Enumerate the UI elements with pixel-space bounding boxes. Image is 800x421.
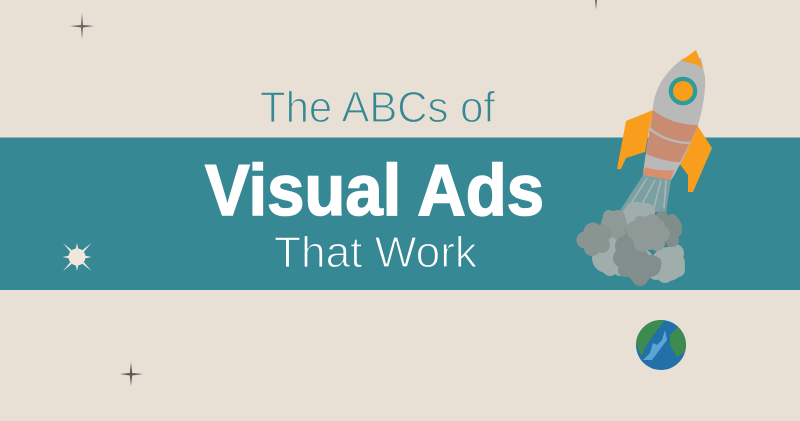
teal banner (0, 138, 800, 290)
rocket exhaust streaks (619, 175, 671, 212)
left fin (617, 110, 653, 169)
rocket body (643, 58, 705, 180)
icon: star bottom left (120, 362, 143, 386)
title line: The ABCs of: The ABCs of (260, 83, 496, 132)
smoke cloud (576, 202, 685, 286)
title line: That Work: That Work (274, 228, 478, 277)
rocket nose cone (681, 50, 703, 68)
rocket lower salmon nozzle (643, 167, 674, 180)
right fin (679, 125, 712, 192)
icon: earth globe (636, 320, 686, 370)
icon: star top edge (595, 0, 597, 10)
rocket window (669, 77, 697, 105)
icon: rocket with smoke (576, 50, 712, 286)
title line: Visual Ads: Visual Ads (205, 151, 544, 231)
rocket stripe (649, 128, 690, 143)
rocket body salmon section (646, 110, 698, 162)
icon: star top left (70, 13, 94, 39)
icon: sparkle star on banner (62, 243, 92, 271)
